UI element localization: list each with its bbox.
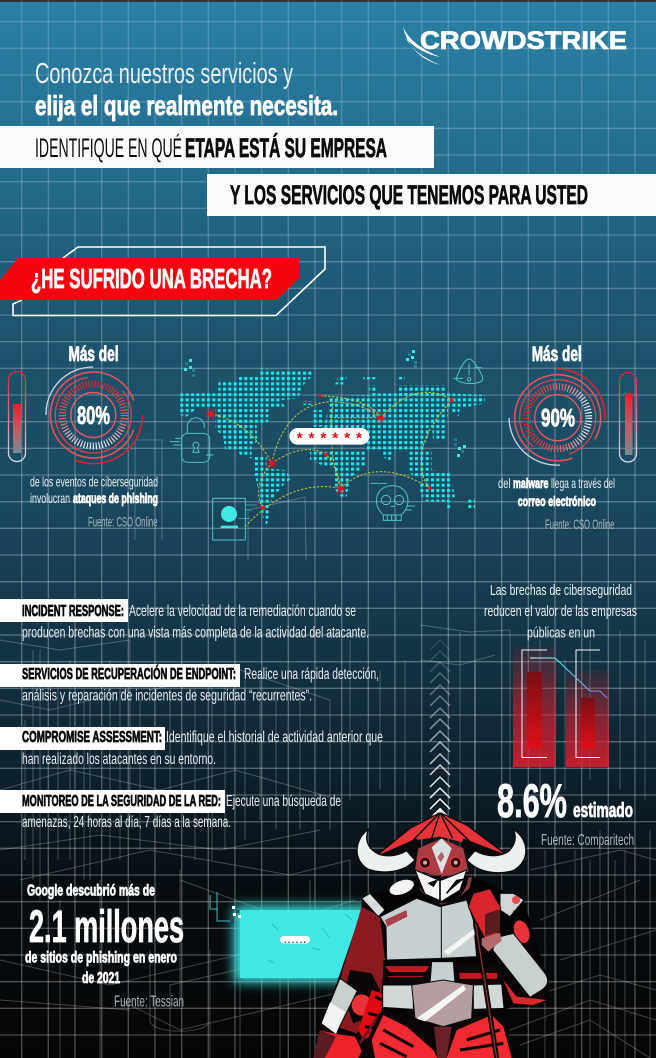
description 80%: involucran (30, 490, 70, 506)
cyan screen (210, 892, 382, 982)
head (415, 838, 473, 905)
description 90%: malware (513, 475, 549, 491)
ring gauge 80% (38, 360, 148, 470)
banner: servicios (207, 174, 656, 216)
description 90%: del (498, 475, 510, 491)
pixel squares (184, 350, 466, 457)
description 80% (30, 474, 158, 506)
heading: he sufrido una brecha (0, 247, 325, 316)
dotted continents (180, 368, 485, 527)
belt (383, 960, 504, 1027)
description: públicas en un (527, 624, 595, 642)
icon: lock (170, 418, 213, 462)
bar chart (513, 647, 609, 767)
panel: value reduction (484, 582, 637, 849)
ring gauge 90% (503, 363, 613, 473)
value 80%: 80% (77, 402, 110, 430)
heading: he sufrido una brecha: ¿HE SUFRIDO UNA BRECHA? (31, 263, 272, 294)
service: recuperacion de endpoint: Realice una rápida detección, (244, 666, 379, 683)
description (484, 582, 637, 642)
password pill: ****** (297, 431, 362, 448)
world map (170, 350, 485, 540)
description 80%: ataques de phishing (73, 490, 158, 506)
illustration: bull warrior (313, 810, 549, 1058)
panel: google stat: Google descubrió más de (27, 882, 155, 900)
service: monitoreo: MONITOREO DE LA SEGURIDAD DE LA RED: (22, 793, 221, 810)
panel: stat 80% (8, 343, 158, 530)
service: monitoreo: amenazas, 24 horas al día, 7 días a la semana. (22, 814, 231, 831)
banner: identifique: IDENTIFIQUE EN QUÉ (35, 133, 182, 163)
connection arcs (211, 392, 452, 527)
panel: stat 90% (498, 343, 636, 532)
panel: google stat (25, 882, 184, 1010)
panel: google stat: Fuente: Tessian (114, 994, 184, 1010)
panel: google stat: 2.1 millones (29, 901, 184, 952)
arm: right (468, 889, 549, 1058)
service: recuperacion de endpoint: SERVICIOS DE RECUPERACIÓN DE ENDPOINT: (22, 664, 236, 683)
description 80%: de los eventos de ciberseguridad (30, 474, 158, 490)
chest armor (362, 877, 524, 960)
banner: identifique: ETAPA ESTÁ SU EMPRESA (185, 132, 387, 163)
title: Conozca nuestros servicios y (35, 58, 293, 90)
service: recuperacion de endpoint (0, 664, 379, 704)
silhouette (313, 877, 549, 1058)
service: compromise assessment: COMPROMISE ASSESSMENT: (22, 729, 162, 746)
arm: left (313, 907, 385, 1058)
panel: google stat: de 2021 (82, 970, 120, 987)
icon: id card (213, 498, 257, 540)
logo: CrowdStrike (403, 27, 627, 65)
service: compromise assessment (0, 727, 383, 768)
description 90%: correo electrónico (518, 493, 596, 509)
service: incident response (0, 599, 369, 642)
title (35, 58, 338, 121)
wireframe city (0, 440, 656, 1058)
icon: skull (371, 483, 415, 520)
cyan screen: ...... (284, 935, 306, 945)
service: recuperacion de endpoint: análisis y reparación de incidentes de seguridad “recurrentes”. (22, 688, 312, 704)
thermometer left (8, 372, 26, 462)
value 90%: 90% (541, 404, 575, 432)
label mas del: Más del (532, 343, 582, 366)
source 80%: Fuente: CSO Online (88, 514, 158, 530)
service: incident response: INCIDENT RESPONSE: (22, 603, 124, 620)
description 90% (498, 475, 615, 509)
service: monitoreo: Ejecute una búsqueda de (226, 793, 341, 810)
attack points (206, 394, 454, 510)
logo: CrowdStrike: CROWDSTRIKE (420, 27, 627, 55)
horns (357, 829, 526, 873)
arrow: chevrons (430, 640, 450, 816)
service: monitoreo (0, 790, 341, 831)
service: incident response: producen brechas con una vista más completa de la actividad del atacante. (22, 624, 369, 642)
icon: warning cloud (453, 359, 483, 383)
service: compromise assessment: Identifique el historial de actividad anterior que (166, 729, 383, 746)
panel: google stat: de sitios de phishing en enero (25, 950, 177, 966)
thermometer right (620, 372, 636, 462)
service: compromise assessment: han realizado los atacantes en su entorno. (22, 751, 216, 768)
description 90%: llega a través del (551, 475, 615, 491)
hat (375, 810, 507, 860)
value 8.6%: 8.6% (497, 774, 567, 827)
legs (358, 1010, 513, 1058)
label mas del: Más del (68, 343, 118, 366)
title: elija el que realmente necesita. (35, 90, 338, 121)
banner: identifique (0, 126, 434, 168)
service: incident response: Acelere la velocidad de la remediación cuando se (129, 603, 356, 620)
